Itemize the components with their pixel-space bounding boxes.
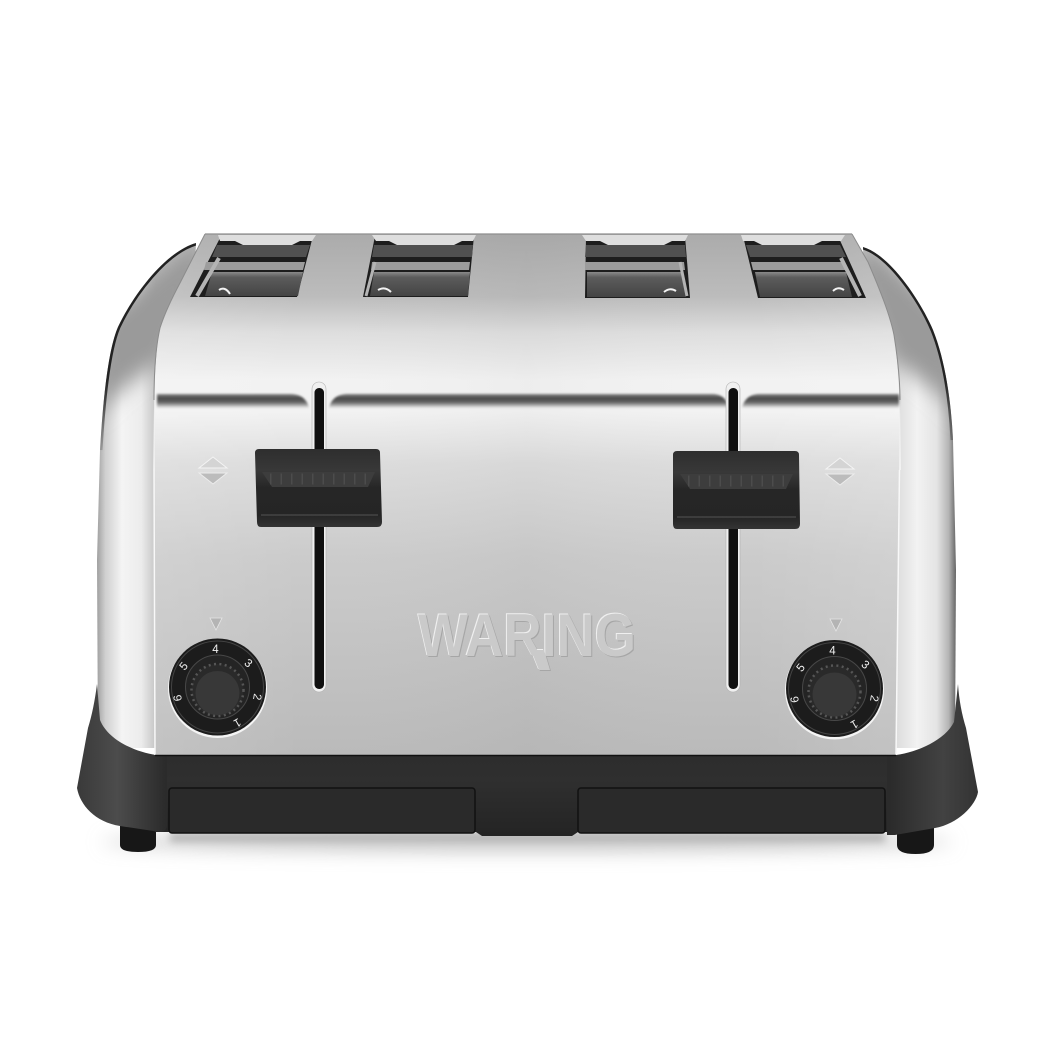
base right corner — [887, 684, 978, 835]
icon: dial pointer right — [830, 619, 842, 631]
rubber feet — [120, 826, 934, 854]
right side shell — [863, 247, 956, 748]
toast slot 2 — [363, 235, 476, 297]
lever handle right — [673, 451, 800, 529]
toast slot 3 — [582, 235, 690, 298]
base tray — [155, 754, 896, 836]
browning dial left — [168, 638, 267, 738]
base left corner — [77, 684, 167, 832]
front panel — [154, 234, 900, 756]
icon: up down diamond right — [826, 458, 854, 485]
left side shell — [97, 243, 196, 748]
lever slot left — [312, 382, 326, 692]
crumb tray left — [169, 788, 475, 833]
icon: up down diamond left — [199, 457, 227, 484]
base — [77, 684, 978, 836]
toast slot 4 — [741, 235, 866, 298]
lever slot right — [726, 382, 740, 692]
ground shadow — [102, 833, 952, 851]
lever handle left — [255, 449, 382, 527]
browning dial right — [785, 640, 884, 740]
toast slot 1 — [190, 235, 316, 297]
brand logo: WARING — [418, 602, 636, 669]
crumb tray right — [578, 788, 885, 833]
icon: dial pointer left — [210, 618, 222, 630]
toaster — [77, 234, 978, 854]
reflection band — [157, 394, 899, 408]
